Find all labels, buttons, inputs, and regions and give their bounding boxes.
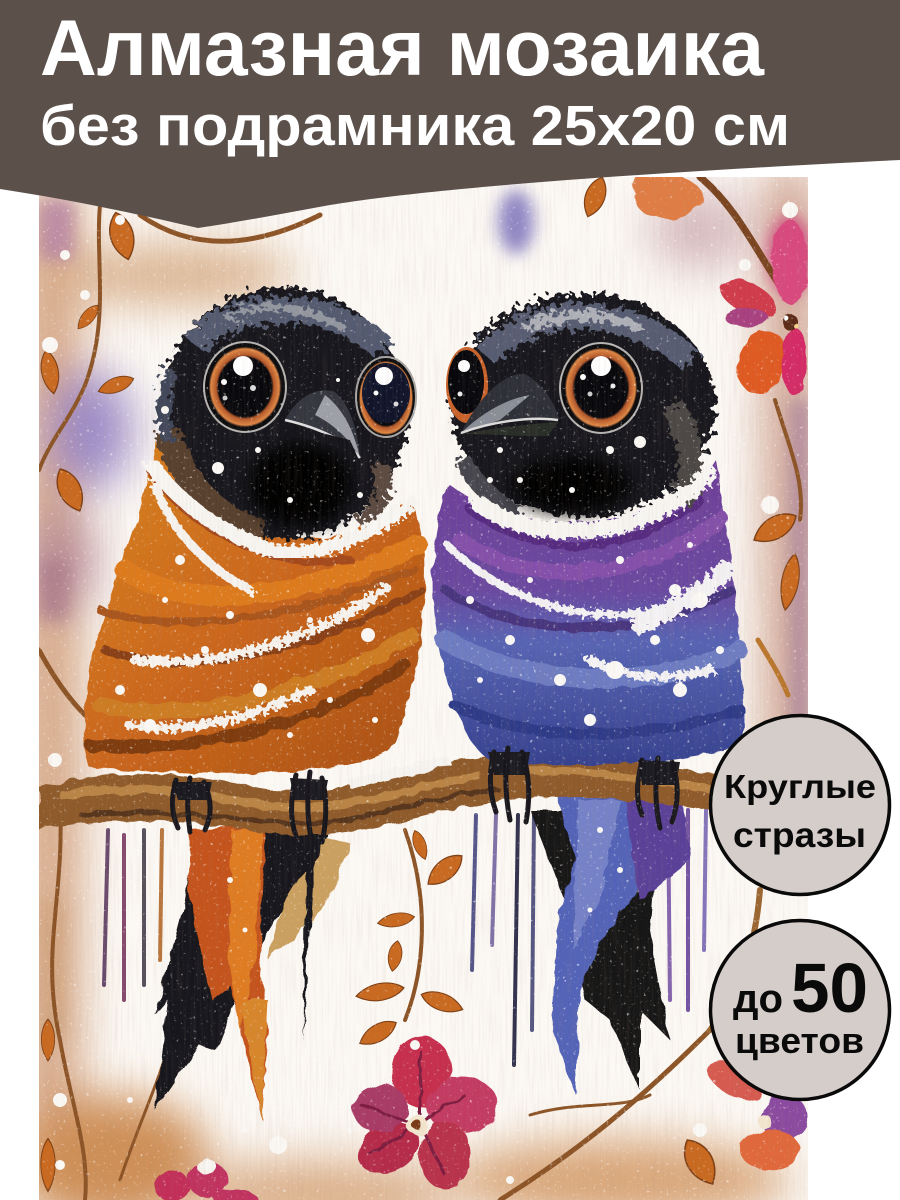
canvas streak texture — [39, 177, 808, 1200]
hanging feather drips — [104, 810, 706, 1065]
badge: round rhinestones: Круглые — [724, 768, 876, 805]
badge: round rhinestones: стразы — [733, 816, 866, 855]
header banner — [0, 0, 900, 228]
eye: small right — [356, 357, 416, 437]
branch — [39, 755, 735, 835]
bird left: tail feathers — [155, 825, 352, 1120]
eye: small left — [446, 347, 488, 423]
flower: top right — [714, 220, 808, 400]
fur mass — [451, 293, 715, 517]
right scarf tail — [552, 796, 638, 1095]
claws — [172, 748, 680, 842]
flower: bottom centre — [349, 1036, 498, 1189]
eye: large right — [560, 343, 642, 433]
badge: up to 50 colours: 50 — [791, 949, 868, 1027]
bird right: purple and blue scarf — [433, 460, 744, 765]
panel: painting of two birds in scarves — [10, 170, 815, 1200]
scarf snow bands — [447, 545, 725, 677]
painting background wash — [10, 170, 815, 1200]
scarf folds — [445, 500, 740, 734]
badge: up to 50 colours: до — [733, 977, 783, 1021]
scarf snow bands — [128, 485, 390, 728]
bird left: orange scarf — [84, 440, 425, 773]
eye: large left — [204, 342, 286, 432]
fur mass — [159, 287, 407, 539]
bird right: tail feathers — [530, 770, 690, 1095]
badge: round rhinestones — [710, 716, 890, 894]
subtitle: без подрамника 25х20 см — [40, 94, 790, 158]
fine snow speckle — [39, 177, 808, 1200]
scarf folds — [90, 470, 420, 747]
beak — [461, 374, 559, 436]
badge: up to 50 colours: цветов — [735, 1020, 864, 1061]
title: Алмазная мозаика — [40, 3, 765, 92]
snowflakes — [42, 202, 798, 1184]
vines — [39, 177, 801, 1200]
bird left: head — [159, 287, 416, 539]
flower: bottom right — [706, 1060, 808, 1171]
badge: up to 50 colours — [710, 920, 890, 1100]
snow collars — [152, 465, 708, 553]
left scarf tail — [188, 825, 268, 1120]
orange leaf top right — [632, 174, 702, 219]
flower: bottom left — [154, 1158, 257, 1200]
bird right: head — [446, 293, 715, 517]
beak — [285, 390, 360, 458]
autumn leaves — [38, 174, 803, 1191]
